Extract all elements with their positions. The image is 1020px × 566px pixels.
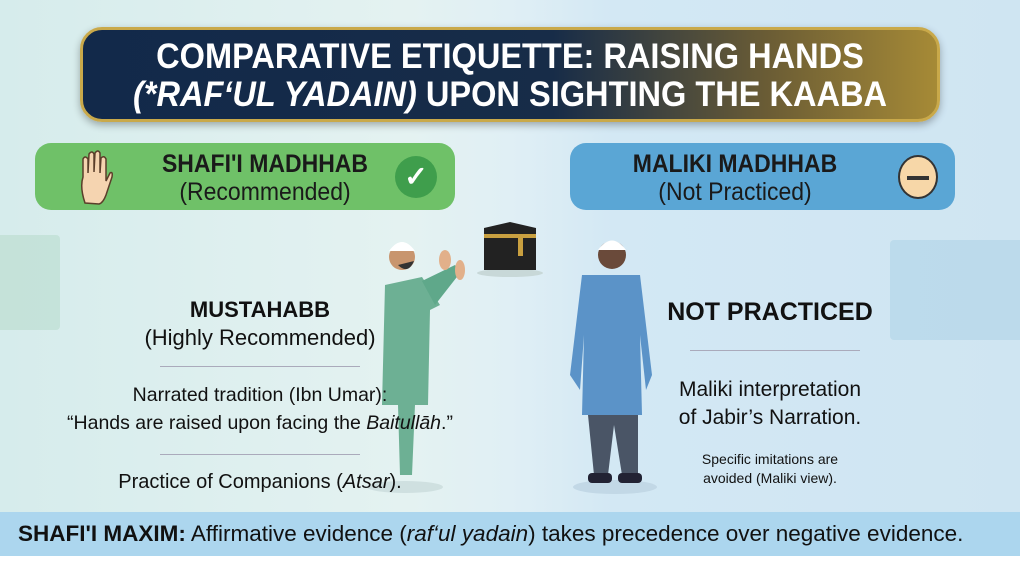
text block: Maliki ruling: avoided (Maliki view). [703, 470, 837, 486]
heading text [633, 150, 837, 206]
icon: check: ✓ [404, 161, 428, 192]
title banner [80, 27, 940, 122]
text block: Shafi'i ruling: MUSTAHABB [190, 297, 330, 322]
title banner: COMPARATIVE ETIQUETTE: RAISING HANDS [156, 37, 864, 76]
text block: Maliki ruling: Maliki interpretation [679, 378, 861, 401]
title banner: (*RAF‘UL YADAIN) UPON SIGHTING THE KAABA [133, 75, 887, 114]
text block: Shafi'i ruling [67, 297, 453, 493]
text block: Shafi'i ruling: “Hands are raised upon facing the Baitullāh.” [67, 412, 453, 434]
heading text: MALIKI MADHHAB [633, 150, 837, 178]
figure: Maliki man standing [570, 240, 657, 494]
decorative kaaba right [890, 240, 1020, 340]
icon: minus [898, 155, 938, 199]
text block: Maliki ruling [667, 298, 873, 486]
text block: Shafi'i ruling: (Highly Recommended) [144, 325, 376, 350]
heading text: SHAFI'I MADHHAB [162, 150, 368, 178]
heading text: (Not Practiced) [658, 178, 812, 206]
panel header: Maliki [570, 143, 955, 210]
text block: Maliki ruling: Specific imitations are [702, 451, 838, 467]
footer: Shafi'i maxim: SHAFI'I MAXIM: Affirmative evidence (raf‘ul yadain) takes precedence over negative evidence. [18, 521, 963, 546]
heading text [162, 150, 368, 206]
footer: Shafi'i maxim [0, 512, 1020, 556]
icon: kaaba [477, 222, 543, 277]
text block: Shafi'i ruling: Narrated tradition (Ibn Umar): [133, 384, 387, 406]
heading text: (Recommended) [179, 178, 351, 206]
decorative kaaba left [0, 235, 60, 330]
text block: Maliki ruling: of Jabir’s Narration. [679, 406, 861, 429]
panel header: Shafi'i [35, 143, 455, 210]
icon: raised hand [81, 150, 113, 205]
figure: Shafi'i man raising hands [368, 242, 465, 493]
text block: Shafi'i ruling: Practice of Companions (Atsar). [118, 471, 402, 493]
icon: check [395, 156, 437, 198]
text block: Maliki ruling: NOT PRACTICED [667, 298, 873, 326]
